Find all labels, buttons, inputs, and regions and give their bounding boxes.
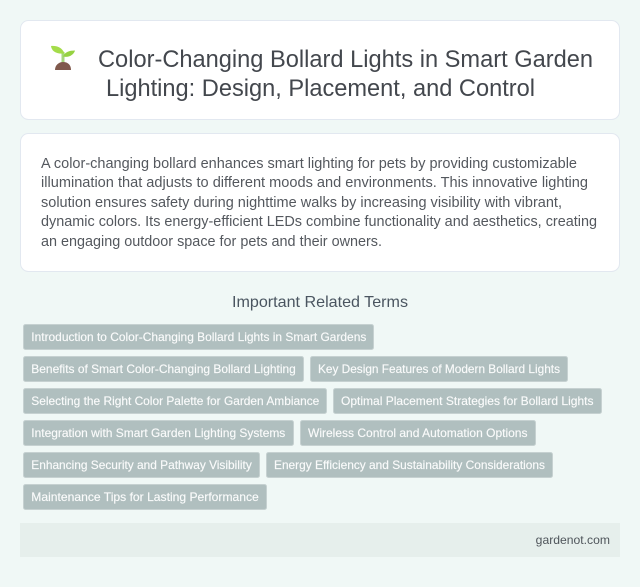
tag: energy efficiency — [266, 452, 552, 478]
text block: introduction — [41, 156, 597, 250]
tag: design features: Key Design Features of Modern Bollard Lights — [318, 362, 560, 376]
tag: benefits — [24, 356, 304, 382]
title: Color-Changing Bollard Lights in Smart Garden — [98, 46, 593, 73]
tag: security — [24, 452, 260, 478]
icon: seedling — [51, 46, 75, 70]
tag: benefits: Benefits of Smart Color-Changing Bollard Lighting — [31, 362, 296, 376]
tag: integration: Integration with Smart Garden Lighting Systems — [31, 426, 285, 440]
footer — [20, 523, 620, 557]
tag: wireless control — [300, 420, 536, 446]
tag: placement: Optimal Placement Strategies for Bollard Lights — [341, 394, 594, 408]
text block: introduction: an engaging outdoor space for pets and their owners. — [41, 234, 382, 250]
text block: introduction: dynamic colors. Its energy-efficient LEDs combine functionality and aesthetics, creating — [41, 214, 597, 230]
text block: introduction: A color-changing bollard enhances smart lighting for pets by providing customizable — [41, 156, 577, 172]
tag: maintenance: Maintenance Tips for Lasting Performance — [31, 490, 259, 504]
tag: design features — [310, 356, 568, 382]
tag: color palette: Selecting the Right Color Palette for Garden Ambiance — [31, 394, 320, 408]
tag list: related terms — [24, 324, 602, 510]
text block: introduction: solution ensures safety during nighttime walks by increasing visibility with vibrant, — [41, 195, 562, 211]
tag: color palette — [24, 388, 326, 414]
panel: introduction — [20, 134, 620, 272]
tag: introduction — [24, 324, 374, 350]
tag: introduction: Introduction to Color-Changing Bollard Lights in Smart Gardens — [31, 330, 366, 344]
tag: placement — [334, 388, 602, 414]
title: Lighting: Design, Placement, and Control — [106, 75, 535, 102]
tag: wireless control: Wireless Control and Automation Options — [308, 426, 528, 440]
title — [98, 46, 593, 102]
heading: related terms: Important Related Terms — [232, 294, 408, 311]
footer credit: gardenot.com — [536, 533, 610, 547]
text block: introduction: illumination that adjusts to different moods and environments. This innovative lighting — [41, 175, 588, 191]
tag: maintenance — [24, 484, 266, 510]
tag: integration — [24, 420, 294, 446]
tag: security: Enhancing Security and Pathway Visibility — [31, 458, 252, 472]
panel: header — [20, 20, 620, 120]
tag: energy efficiency: Energy Efficiency and Sustainability Considerations — [274, 458, 545, 472]
